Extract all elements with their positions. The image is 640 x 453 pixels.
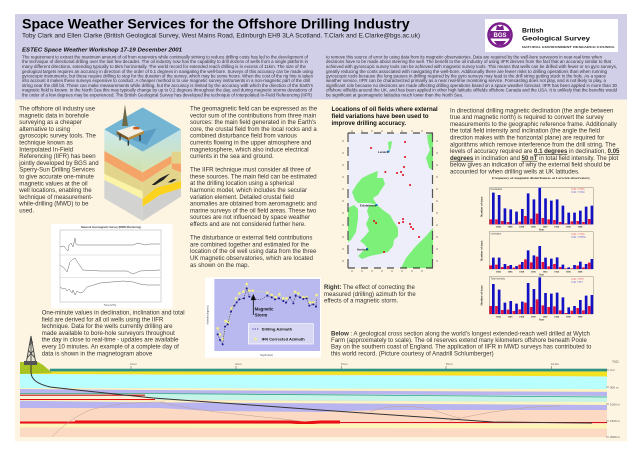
intro text: left column: surveying as a cheaper	[19, 120, 82, 126]
bar chart heading: Frequency of magnetic disturbances at Lerwick observatory	[492, 176, 590, 180]
bar chart: declination: 1996	[566, 227, 572, 229]
geomagnetic field explanation text: variation element. Detailed crustal field	[190, 195, 294, 201]
bar chart: declination: 1994	[554, 226, 560, 229]
abstract left column: magnetic field is known. In the North Sea this may typically change by up to 0.2 degrees throughout the day, and during magnetic storms deviations of	[22, 88, 313, 93]
bar chart: inclination: 1996	[566, 271, 572, 273]
map of oil fields and observatories	[342, 130, 438, 272]
caption: right of azimuth chart: effects of a magnetic storm.	[324, 299, 398, 305]
intro text: left column: technique known as	[19, 140, 73, 146]
geomagnetic field explanation text: harmonic model, which includes the secular	[190, 188, 307, 194]
bar chart: inclination: Inclination	[491, 232, 502, 235]
intro text: left column: Sperry-Sun Drilling Services	[19, 168, 95, 174]
bar chart: inclination: 1986	[508, 271, 513, 273]
bar chart: total intensity: Number of days	[479, 285, 483, 305]
bar chart: inclination: range > 0.05deg	[571, 236, 586, 239]
declination and field accuracy text: degrees in inclination and 50 nT in total field intensity. The plot	[450, 156, 619, 162]
depth scale labels: TVD	[612, 360, 619, 364]
bar chart: total intensity: 1994	[554, 315, 560, 318]
bar chart: total intensity: 1986	[508, 316, 513, 318]
bar chart: total intensity: 1992	[543, 316, 548, 318]
bar chart: total intensity: 1996	[566, 316, 572, 318]
azimuth line chart: Azimuth (degrees)	[206, 305, 209, 325]
magnetogram caption: technique. Data for the wells currently drilling are	[42, 324, 173, 330]
bar chart: declination: Declination	[491, 188, 503, 191]
bar chart: total intensity	[479, 277, 593, 322]
geomagnetic field explanation text: anomalies are obtained from aeromagnetic and	[190, 202, 317, 208]
workshop heading: ESTEC Space Weather Workshop 17-19 December 2001	[22, 48, 182, 54]
bar charts of disturbance frequency	[479, 187, 593, 322]
authors: Toby Clark and Ellen Clarke (British Geological Survey, West Mains Road, Edinburgh EH9 3LA Scotland. T.Clark and E.Clarke@bgs.ac.uk)	[22, 32, 420, 40]
bar chart: declination: range > 0.1deg	[571, 191, 584, 194]
geomagnetic field explanation text: The geomagnetic field can be expressed as the	[190, 106, 318, 112]
intro text: left column: technique of measurement-	[19, 195, 93, 201]
magnetic storm label: Storm	[255, 313, 267, 318]
depth scale labels: 1500 m	[610, 419, 621, 423]
geomagnetic field explanation text: vector sum of the contributions from three main	[190, 113, 316, 119]
bar chart: total intensity: 1984	[496, 315, 502, 318]
magnetogram chart: Time (UTC)	[104, 304, 116, 307]
series: IFR corrected azimuth	[218, 284, 317, 339]
bar chart: total intensity: 1988	[519, 316, 525, 318]
geomagnetic field explanation text: as shown on the map.	[190, 263, 249, 269]
geomagnetic field explanation text: these sources. The main field can be estimated	[190, 174, 317, 180]
caption: below cross section: Bay on the southern coast of England. The application of IIFR in MWD surveys has contributed to	[331, 345, 592, 351]
geomagnetic field explanation text: marine surveys of the oil field areas. These two	[190, 208, 317, 214]
abstract left column: into account it makes these surveys expensive to conduct. A cheaper method is to use magnetic survey instruments in a non-magnetic part of the drill	[22, 78, 310, 83]
bar chart: declination: 1986	[508, 227, 513, 229]
BGS logo	[485, 19, 618, 52]
title: Space Weather Services for the Offshore Drilling Industry	[22, 16, 410, 32]
bar chart: inclination: Year	[539, 275, 544, 277]
bar chart: declination: 1992	[543, 227, 548, 229]
geomagnetic field explanation text: sources are not influenced by space weather	[190, 215, 310, 221]
magnetogram caption: made available to bore-hole surveyors throughout	[42, 331, 175, 337]
depth scale labels: 0 m	[610, 368, 616, 372]
bar chart: declination: 1990	[531, 227, 537, 229]
azimuth line chart	[205, 277, 321, 358]
intro text: left column	[18, 106, 99, 214]
abstract left column: gyroscopic instruments, but these require drilling to stop for the duration of the survey, which may be some hours. When the cost of the rig hire is taken	[22, 74, 314, 78]
series: drilling azimuth	[218, 288, 317, 344]
abstract right column	[326, 54, 618, 97]
geomagnetic field explanation text: The IIFR technique must consider all three of	[190, 168, 311, 174]
declination and field accuracy text: true and magnetic north) is required to convert the survey	[450, 115, 605, 121]
geomagnetic field explanation text: currents in the sea and ground.	[190, 154, 274, 160]
distance scale labels: 8 km	[446, 362, 453, 366]
declination and field accuracy text: accounted for when drilling wells at UK latitudes.	[450, 170, 580, 176]
geomagnetic field explanation text: effects and are not considered further here.	[190, 222, 306, 228]
well path	[31, 365, 592, 423]
abstract left column: many different directions, extending typically to 5km horizontally. The world record for extended reach drilling is in excess of 11km. The size of the	[22, 64, 307, 69]
bar chart: declination: Year	[539, 230, 544, 232]
abstract right column: to remove this source of error by using data from its magnetic observatories. Data are required by the well-bore surveyors in near-real time when	[326, 54, 603, 60]
icon: oil platform	[117, 104, 144, 146]
geomagnetic field explanation text: location of the oil well using data from the three	[190, 249, 317, 255]
caption: below cross section: Farm (approximately to scale). The oil reserves extend many kilometers offshore beneath Poole	[331, 338, 588, 344]
bar chart: inclination	[479, 232, 593, 277]
chart legend: IFR Corrected Azimuth	[262, 336, 305, 341]
distance scale labels: 2 km	[130, 362, 137, 366]
caption: below cross section	[331, 331, 592, 357]
abstract right column: weather service, IIFR can be characterized primarily as a near real-time monitoring service. Forecasting does not play, and is not likely to play, a	[326, 78, 607, 83]
intro text: left column: Interpolated In-Field	[19, 147, 73, 153]
map heading: field variations have been used to	[332, 114, 429, 120]
magnetic storm label: Magnetic	[255, 306, 274, 311]
geomagnetic field explanation text: UK magnetic observatories, which are located	[190, 256, 313, 262]
abstract left column: the order of a few degrees may be experienced. The British Geological Survey has developed the technique of Interpolated In-Field Referencing (IIFR)	[22, 92, 313, 97]
abstract right column: gyroscopic tools because the long pauses in drilling required by the gyro surveys may lead to the drill string getting stuck in the hole. As a space	[326, 74, 607, 78]
declination and field accuracy text: In directional drilling magnetic declination (the angle between	[450, 108, 613, 114]
bar chart: inclination: Number of days	[479, 240, 483, 261]
depth scale labels	[606, 360, 621, 439]
abstract right column: be significant at geomagnetic latitudes much lower than the North Sea.	[326, 92, 463, 97]
abstract right column: decisions have to be made about steering the well. The benefit to the oil industry of using IIFR derives from the fact that an accuracy similar to that	[326, 59, 612, 64]
abstract right column: offshore oilfields around the UK, and has been applied in other high latitude oilfields offshore Canada and the USA. It is unlikely that the benefits would	[326, 88, 618, 93]
bar chart: declination: 1988	[519, 227, 525, 229]
observatory: Lerwick: Lerwick	[378, 150, 389, 154]
geological block diagram with oil platform	[104, 104, 181, 221]
abstract right column: significant role because no decisions are made affecting drilling operations based on a space weather forecast. IIFR has been applied in more than 30	[326, 83, 618, 88]
geomagnetic field explanation text: magnetosphere, which also induce electrical	[190, 147, 309, 153]
geomagnetic field explanation text: are combined together and estimated for the	[190, 242, 310, 248]
distance scale labels: 4 km	[235, 362, 242, 366]
bar chart: inclination: 1998	[578, 271, 583, 273]
geomagnetic field explanation text: sources: the main field generated in the Earth's	[190, 120, 316, 126]
abstract left column: The requirement to extract the maximum amount of oil from reservoirs while continually striving to reduce drilling costs has led to the development of	[22, 54, 309, 60]
magnetogram chart	[51, 224, 172, 308]
header panel	[15, 14, 627, 100]
abstract right column: achieved with gyroscopic survey tools can be achieved with magnetic survey tools. This means that wells can be drilled with fewer or no gyro surveys,	[326, 64, 617, 69]
intro text: left column: Referencing (IIFR) has been	[19, 154, 96, 160]
abstract left column: geological targets requires an accuracy in direction of the order of 0.1 degrees in navigating the well-bore. Surveys of this accuracy can be made using	[22, 69, 314, 74]
caption: right of azimuth chart: Right: The effect of correcting the	[324, 285, 415, 291]
declination and field accuracy text: below gives an indication of why the external field should be	[450, 163, 611, 169]
BGS logo: British	[522, 28, 544, 34]
declination and field accuracy text: algorithms which remove interference from the drill string. The	[450, 142, 616, 148]
bar chart: total intensity: Total Intensity	[491, 277, 506, 280]
icon: small drilling rig	[24, 336, 37, 365]
bar chart: inclination: 1994	[554, 270, 560, 273]
azimuth line chart: Depth (feet)	[261, 354, 273, 357]
distance scale labels: 10 km	[551, 362, 560, 366]
geomagnetic field explanation text: at the drilling location using a spherical	[190, 181, 294, 187]
map heading	[332, 107, 438, 127]
magnetogram caption: every 10 minutes. An example of a complete day of	[42, 344, 179, 350]
arrow: magnetic storm	[251, 295, 255, 315]
bar chart: total intensity: Year	[539, 320, 544, 322]
abstract left column: the technique of directional drilling over the last few decades. The oil industry now has the capability to drill dozens of wells from a single platform in	[22, 59, 309, 64]
intro text: left column: well locations, enabling the	[18, 188, 92, 194]
bar chart: inclination: 1990	[531, 271, 537, 273]
distance scale labels	[130, 362, 560, 369]
depth scale labels: 1000 m	[610, 402, 621, 406]
bar chart: total intensity: 1990	[531, 316, 537, 318]
BGS logo: NATURAL ENVIRONMENT RESEARCH COUNCIL	[522, 45, 615, 49]
bar chart: declination	[479, 187, 593, 232]
chart legend: Drilling Azimuth	[262, 326, 293, 331]
land masses	[348, 133, 433, 268]
geomagnetic field explanation text: core, the crustal field from the local rocks and a	[190, 127, 317, 133]
intro text: left column: used.	[19, 208, 34, 214]
declination and field accuracy text: levels of accuracy required are 0.1 degrees in declination, 0.05	[450, 149, 620, 155]
geomagnetic field explanation text: The disturbance or external field contributions	[190, 236, 312, 242]
intro text: left column: gyroscopic survey tools. The	[19, 134, 96, 140]
caption: right of azimuth chart: measured (drilling) azimuth for the	[324, 292, 416, 298]
intro text: left column: jointly developed by BGS and	[18, 161, 99, 167]
intro text: left column: alternative to using	[19, 127, 70, 133]
map frame ticks	[348, 133, 433, 268]
intro text: left column: magnetic data in borehole	[19, 113, 90, 119]
oil field markers	[371, 142, 419, 252]
intro text: left column: The offshore oil industry use	[19, 106, 96, 112]
bar chart: declination: range > 0.2deg	[571, 187, 584, 190]
intro text: left column: magnetic values at the oil	[19, 181, 88, 187]
bar chart: total intensity: 1998	[578, 316, 583, 318]
bar chart: declination: 1984	[496, 226, 502, 229]
depth scale labels: 2000 m	[610, 435, 621, 439]
chart legend	[248, 324, 313, 344]
map heading: improve drilling accuracy.	[332, 121, 406, 127]
abstract left column	[22, 54, 314, 97]
geomagnetic field explanation text	[190, 106, 318, 269]
declination and field accuracy text	[450, 108, 620, 176]
caption: below cross section: this world record. (Picture courtesy of Anadrill Schlumberger)	[331, 351, 494, 357]
abstract right column: greatly reducing the costs associated with navigating the well-bore. Additionally there are fewer risks to drilling operations than when running	[326, 69, 608, 74]
bar chart: declination: Number of days	[479, 196, 483, 217]
bar chart: inclination: 1984	[496, 270, 502, 273]
magnetogram caption: the day in close to real-time - updates are available	[42, 338, 179, 344]
map heading: Locations of oil fields where external	[332, 107, 438, 113]
observatory: Eskdalemuir: Eskdalemuir	[360, 204, 378, 208]
declination and field accuracy text: the total field intensity and inclination (the angle the field	[450, 129, 600, 135]
geomagnetic field explanation text: currents flowing in the upper atmosphere and	[190, 140, 311, 146]
bar chart: inclination: 1992	[543, 271, 548, 273]
bar chart: inclination: range > 0.1deg	[571, 232, 584, 235]
magnetogram caption: data is shown in the magnetogram above	[42, 351, 153, 357]
bar chart: total intensity: range > 100nT	[571, 277, 585, 280]
caption: below cross section: Below : A geological cross section along the world's longest extended-reach well drilled at Wytch	[331, 331, 590, 337]
intro text: left column: to give accurate one-minute	[19, 174, 95, 180]
magnetogram caption: field are derived for all oil wells using the IIFR	[42, 317, 164, 323]
geological cross section	[20, 336, 621, 439]
bar chart: total intensity: range > 50nT	[571, 281, 584, 284]
depth scale labels: 500 m	[610, 386, 619, 390]
geomagnetic field explanation text: combined disturbance field from various	[190, 134, 297, 140]
observatory: Hartland: Hartland	[357, 248, 369, 252]
declination and field accuracy text: direction makes with the horizontal plane) are required for	[450, 136, 604, 142]
BGS logo: Geological Survey	[522, 36, 590, 42]
bar chart: declination: 1998	[578, 227, 583, 229]
intro text: left column: while-drilling (MWD) to be	[18, 202, 89, 208]
caption: right of azimuth chart	[324, 285, 416, 305]
distance scale labels: 6 km	[341, 362, 348, 366]
magnetogram chart: Network Geomagnetic Survey (MWD Monitoring)	[81, 225, 141, 229]
BGS logo: BGS	[493, 33, 507, 39]
bar chart: inclination: 1988	[519, 271, 525, 273]
abstract left column: string near the drill bit. These can make measurements while drilling, but the accuracy is limited by the accuracy with which the direction of the Earth's	[22, 83, 313, 88]
magnetogram caption: One-minute values in declination, inclination and total	[42, 310, 185, 316]
declination and field accuracy text: measurements to the geographic reference frame. Additionally	[450, 122, 618, 128]
magnetogram caption	[42, 310, 185, 357]
